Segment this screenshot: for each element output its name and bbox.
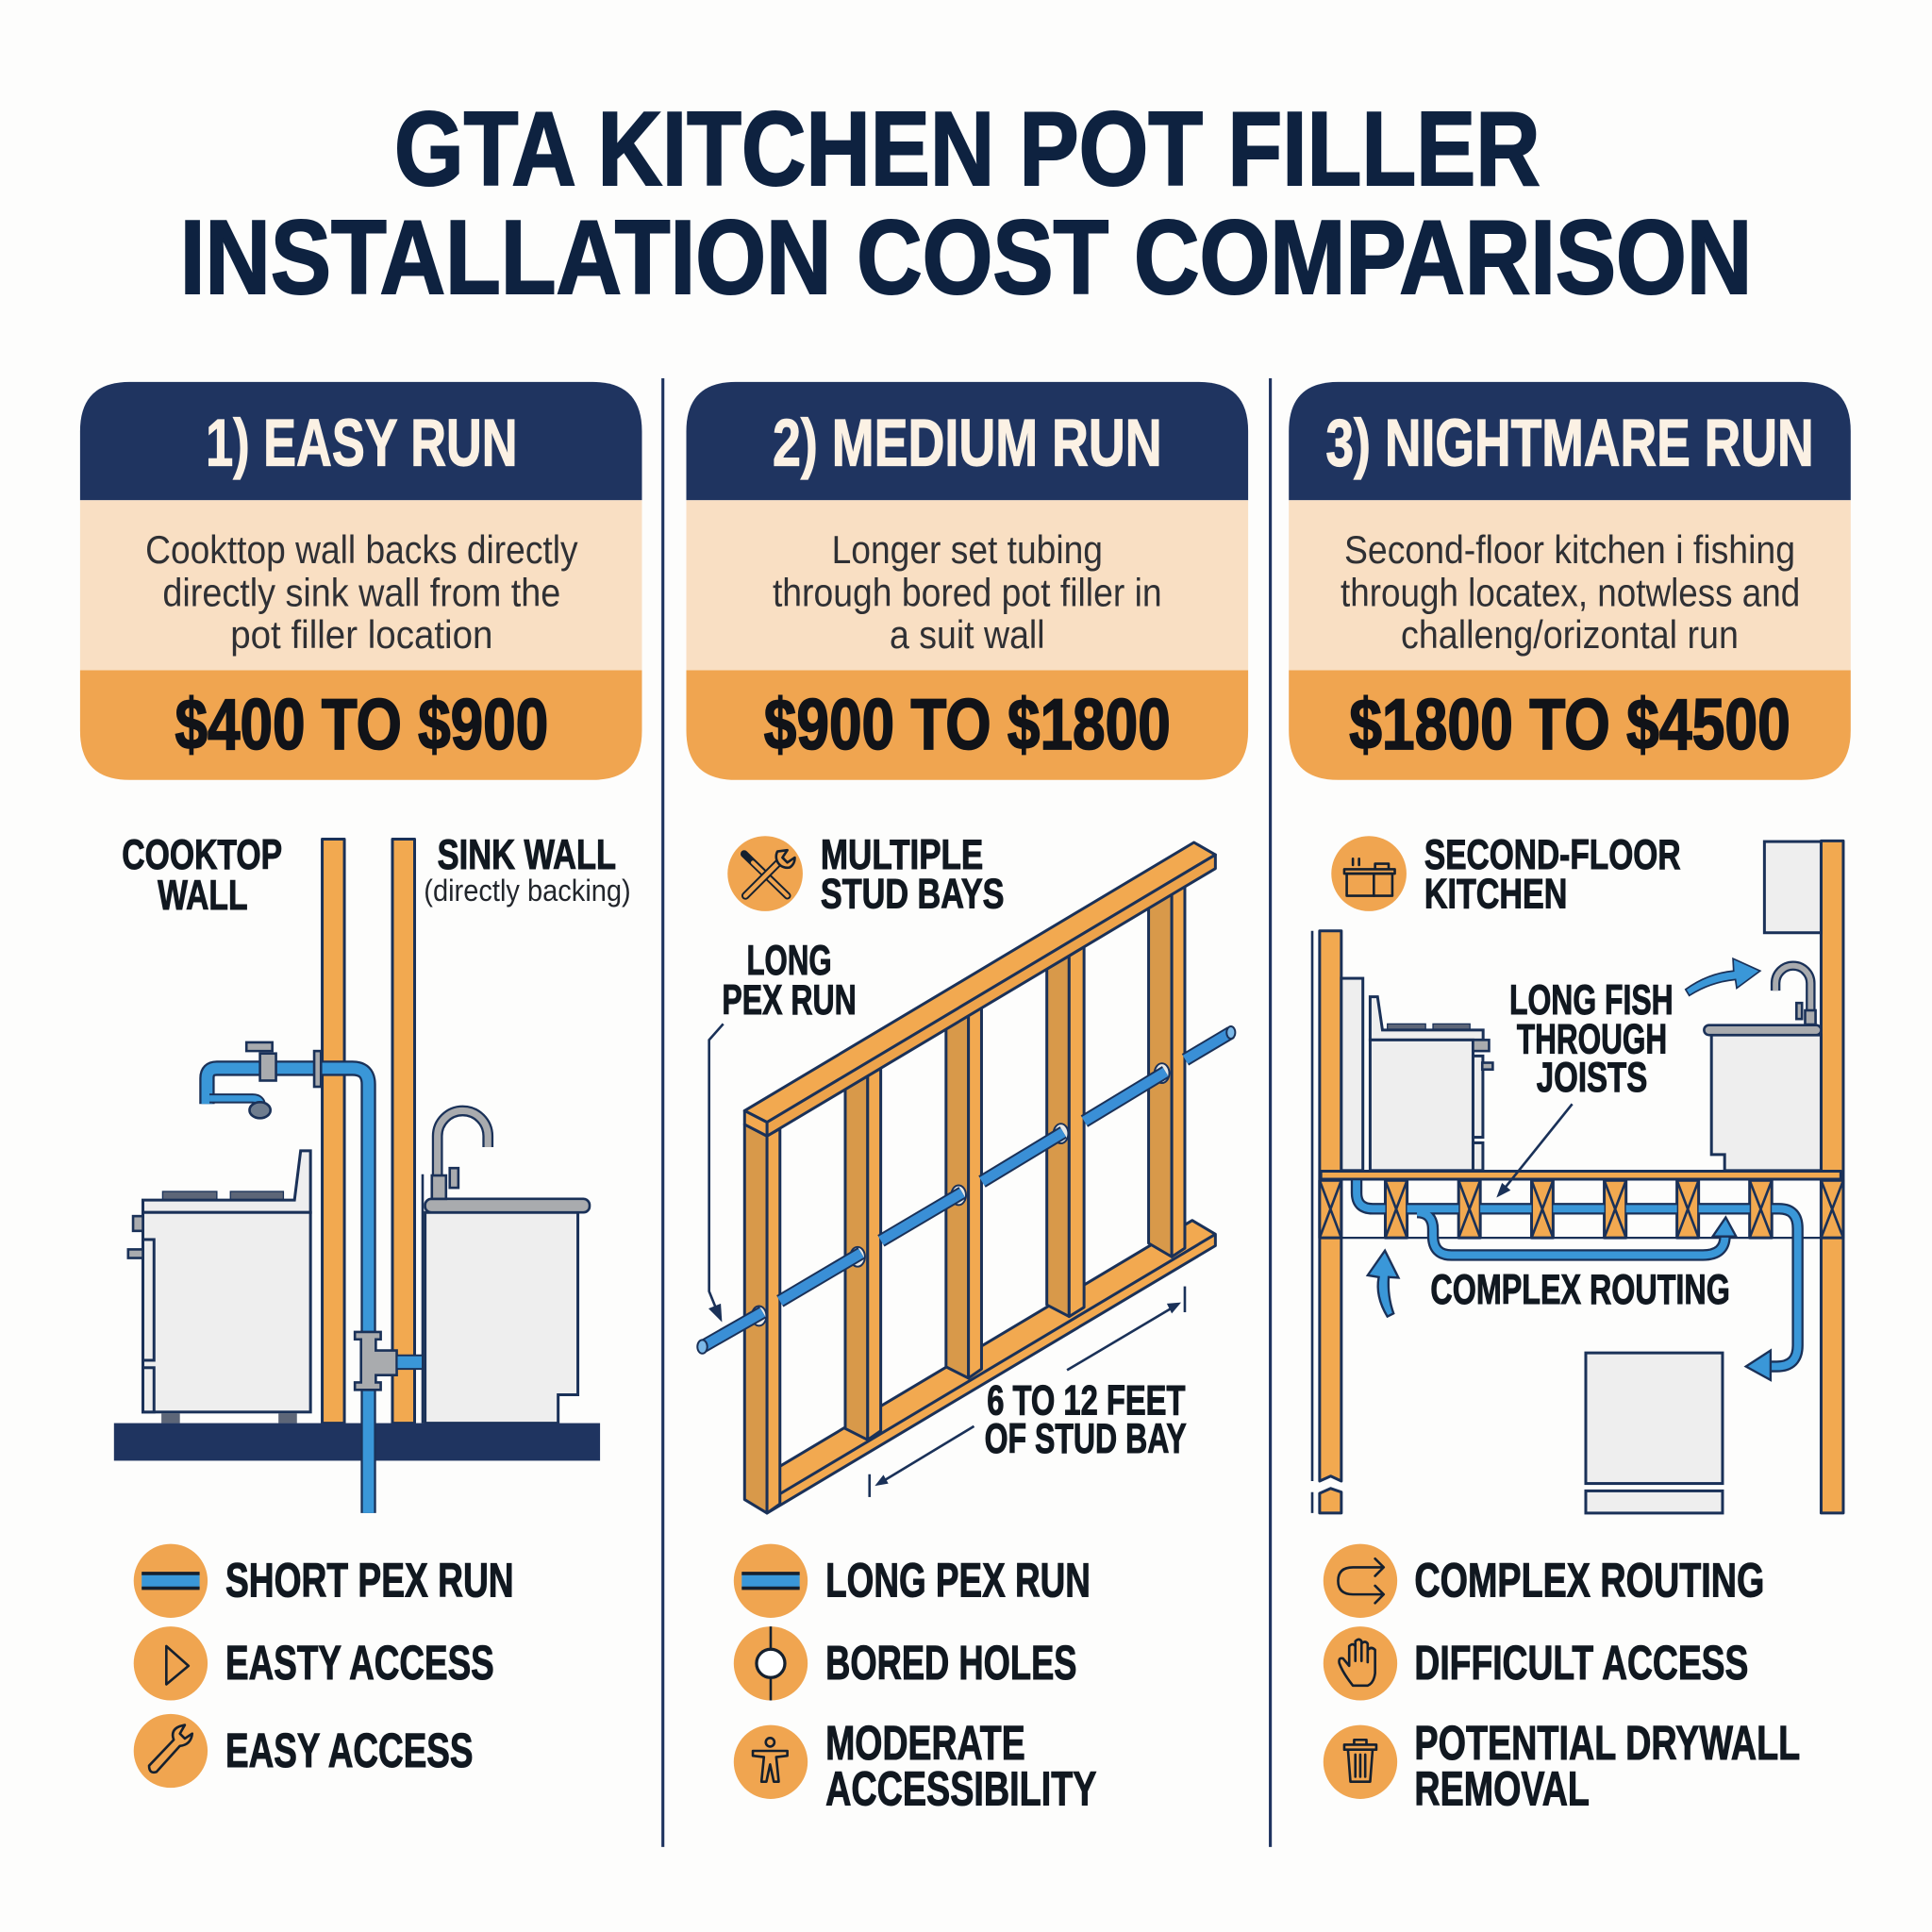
feature: moderate accessibility: ACCESSIBILITY	[825, 1761, 1096, 1815]
title	[180, 90, 1752, 316]
description: easy run: Cookttop wall backs directly	[145, 527, 578, 572]
description: medium run: a suit wall	[890, 612, 1045, 657]
panel: medium run card	[687, 382, 1248, 780]
description: nightmare run	[1289, 500, 1851, 671]
header: medium run: 2) MEDIUM RUN	[773, 406, 1162, 480]
feature list: easy run	[134, 1544, 514, 1788]
stud 5	[1149, 886, 1185, 1257]
label: cooktop wall	[122, 832, 282, 919]
description: easy run	[80, 500, 641, 671]
description: medium run	[687, 500, 1248, 671]
feature: potential drywall removal: POTENTIAL DRYWALL	[1414, 1716, 1800, 1770]
label: second-floor kitchen	[1424, 832, 1681, 918]
label: cooktop wall: COOKTOP	[122, 832, 282, 878]
label: 6 to 12 feet of stud bay	[985, 1377, 1187, 1462]
arrow: routing return head	[1713, 1217, 1736, 1237]
panel: easy run card	[80, 382, 641, 780]
feature: long pex run: LONG PEX RUN	[825, 1554, 1091, 1607]
description: medium run: through bored pot filler in	[773, 571, 1162, 615]
walls	[1312, 841, 1843, 1513]
label: long fish through joists: THROUGH	[1517, 1017, 1667, 1063]
bottom plate	[767, 1221, 1215, 1513]
description: nightmare run: challeng/orizontal run	[1401, 612, 1739, 657]
label: multiple stud bays	[821, 832, 1004, 918]
panel: nightmare run card	[1289, 382, 1851, 780]
icon: kitchen counter	[1331, 836, 1407, 911]
label: sink wall	[424, 832, 631, 908]
feature: short pex run	[134, 1544, 514, 1618]
feature: easty access	[134, 1626, 494, 1700]
header: medium run	[687, 382, 1248, 500]
feature: difficult access	[1324, 1626, 1748, 1700]
stud 4	[1047, 947, 1084, 1317]
dimension arrows: stud bay length	[870, 1287, 1185, 1497]
arrow: long pex run leader	[708, 1024, 724, 1322]
label: 6 to 12 feet of stud bay: 6 TO 12 FEET	[987, 1377, 1185, 1424]
sink cabinet	[423, 1110, 590, 1424]
feature: bored holes: BORED HOLES	[825, 1636, 1077, 1690]
left stud	[744, 1124, 780, 1513]
feature: easty access: EASTY ACCESS	[225, 1636, 494, 1690]
price: nightmare run	[1289, 671, 1851, 780]
description: nightmare run: through locatex, notwless and	[1341, 571, 1800, 615]
range	[128, 1151, 310, 1424]
lower cabinet	[1586, 1353, 1723, 1513]
top plate	[744, 842, 1215, 1136]
arrow: curved up	[1368, 1251, 1398, 1317]
diagram: nightmare run second-floor section	[1312, 832, 1843, 1513]
PEX routing through joists	[1357, 1180, 1798, 1366]
label: long pex run	[722, 938, 857, 1024]
feature: difficult access: DIFFICULT ACCESS	[1414, 1636, 1748, 1690]
diagram: medium run stud wall	[697, 832, 1235, 1513]
feature list: medium run	[734, 1544, 1096, 1815]
range	[1370, 997, 1492, 1171]
feature: moderate accessibility: MODERATE	[825, 1716, 1025, 1770]
label: long fish through joists: LONG FISH	[1509, 977, 1674, 1024]
icon: crossed tools	[727, 836, 803, 911]
label: long pex run: LONG	[747, 938, 832, 984]
feature: short pex run: SHORT PEX RUN	[225, 1554, 514, 1607]
label: second-floor kitchen: SECOND-FLOOR	[1424, 832, 1681, 878]
description: medium run: Longer set tubing	[832, 527, 1103, 572]
feature: complex routing: COMPLEX ROUTING	[1414, 1554, 1764, 1607]
price: medium run	[687, 671, 1248, 780]
pot filler piping	[207, 1042, 423, 1513]
label: sink wall: (directly backing)	[424, 873, 631, 908]
label: cooktop wall: WALL	[158, 873, 248, 919]
price: easy run	[80, 671, 641, 780]
description: easy run: pot filler location	[230, 612, 492, 657]
price: nightmare run: $1800 TO $4500	[1349, 685, 1790, 765]
sink cabinet	[1704, 966, 1821, 1171]
price: easy run: $400 TO $900	[175, 685, 548, 765]
arrow: pipe exit left	[1746, 1351, 1771, 1380]
PEX pipe through bored holes	[697, 1026, 1235, 1354]
label: multiple stud bays: STUD BAYS	[821, 872, 1004, 918]
feature: complex routing	[1324, 1544, 1764, 1618]
label: complex routing: COMPLEX ROUTING	[1430, 1267, 1730, 1313]
feature: easy access: EASY ACCESS	[225, 1724, 474, 1777]
feature: easy access	[134, 1714, 474, 1788]
stud 2	[845, 1068, 881, 1440]
upper cabinet	[1764, 841, 1821, 933]
label: long pex run: PEX RUN	[722, 977, 857, 1024]
floor joists	[1320, 1171, 1843, 1238]
feature list: nightmare run	[1324, 1544, 1800, 1815]
arrow: joist leader	[1496, 1104, 1573, 1198]
stud 3	[946, 1008, 981, 1378]
label: long fish through joists	[1509, 977, 1674, 1101]
label: long fish through joists: JOISTS	[1537, 1055, 1647, 1101]
description: easy run: directly sink wall from the	[162, 571, 560, 615]
feature: potential drywall removal	[1324, 1716, 1800, 1815]
arrow: toward sink	[1686, 958, 1760, 995]
header: easy run: 1) EASY RUN	[206, 406, 518, 480]
description: nightmare run: Second-floor kitchen i fishing	[1344, 527, 1795, 572]
floor	[114, 1424, 600, 1460]
feature: long pex run	[734, 1544, 1091, 1618]
feature: bored holes	[734, 1626, 1077, 1700]
header: nightmare run	[1289, 382, 1851, 500]
timber frame	[744, 842, 1215, 1513]
backsplash panel	[1341, 978, 1363, 1171]
label: second-floor kitchen: KITCHEN	[1424, 872, 1567, 918]
studs	[323, 839, 415, 1424]
label: multiple stud bays: MULTIPLE	[821, 832, 983, 878]
label: 6 to 12 feet of stud bay: OF STUD BAY	[985, 1416, 1187, 1462]
title: GTA KITCHEN POT FILLER	[394, 90, 1541, 208]
price: medium run: $900 TO $1800	[764, 685, 1171, 765]
label: sink wall: SINK WALL	[438, 832, 616, 878]
header: easy run	[80, 382, 641, 500]
feature: potential drywall removal: REMOVAL	[1414, 1761, 1590, 1815]
feature: moderate accessibility	[734, 1716, 1096, 1815]
diagram: easy run wall section	[114, 832, 631, 1513]
